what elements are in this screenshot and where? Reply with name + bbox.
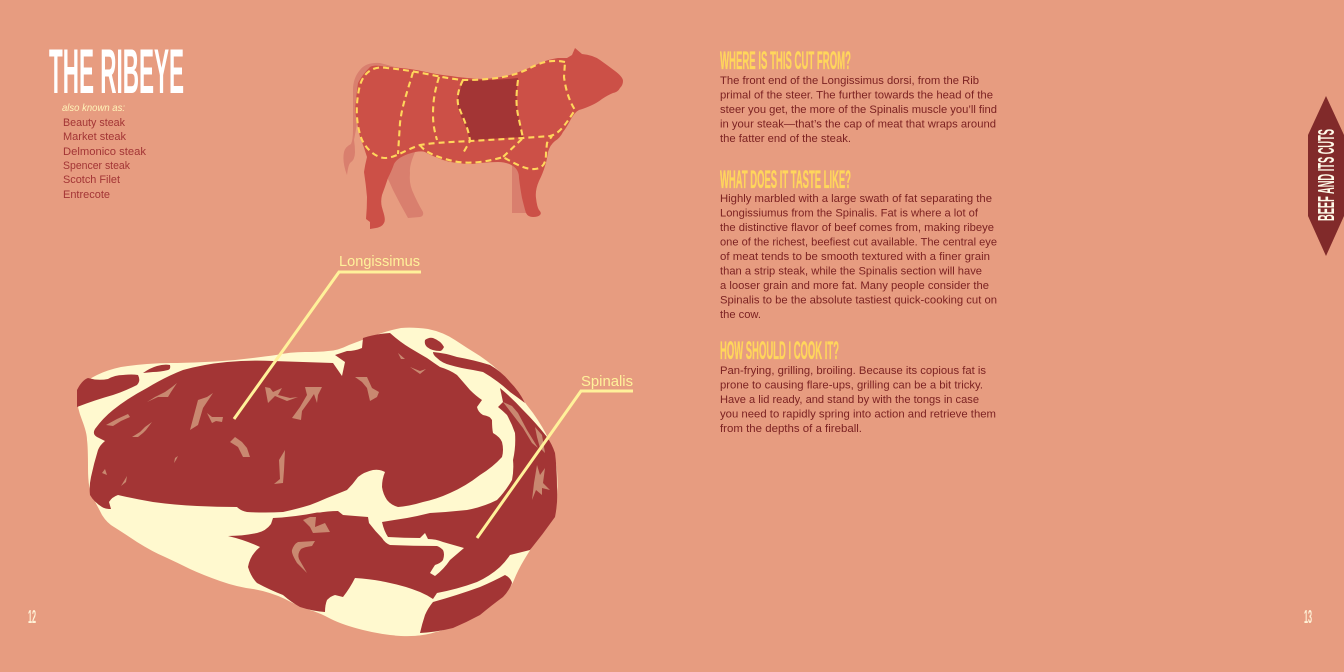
section: what does it taste like: Highly marbled with a large swath of fat separating the — [720, 193, 992, 205]
also known as list: Spencer steak — [63, 160, 131, 172]
section: how should I cook it: HOW SHOULD I COOK IT? — [720, 337, 839, 365]
section: where is this cut from: WHERE IS THIS CUT FROM? — [720, 47, 851, 75]
cow diagram — [343, 48, 623, 229]
section: what does it taste like: Longissiumus from the Spinalis. Fat is where a lot of — [720, 208, 978, 220]
section: how should I cook it: prone to causing flare-ups, grilling can be a bit tricky. — [720, 380, 983, 392]
section: where is this cut from: The front end of the Longissimus dorsi, from the Rib — [720, 75, 979, 87]
text: 13 — [1304, 607, 1312, 627]
steak illustration — [77, 328, 558, 636]
callout: Spinalis — [477, 374, 633, 538]
rib primal highlight — [458, 78, 523, 141]
cow far legs and tail — [343, 63, 530, 218]
section: what does it taste like: than a strip steak, while the Spinalis section will have — [720, 266, 982, 278]
section: what does it taste like: Spinalis to be the absolute tastiest quick-cooking cut on — [720, 294, 997, 306]
marbling — [102, 353, 550, 573]
text: THE RIBEYE — [49, 37, 184, 107]
section: where is this cut from: the fatter end of the steak. — [720, 133, 851, 145]
section: what does it taste like — [720, 166, 997, 321]
section: what does it taste like: a looser grain and more fat. Many people consider the — [720, 280, 989, 292]
also known as list: Delmonico steak — [63, 146, 147, 158]
Longissimus muscle — [90, 333, 503, 512]
cow body — [355, 48, 623, 229]
section: how should I cook it — [720, 337, 996, 435]
section: what does it taste like: the distinctive flavor of beef comes from, making ribeye — [720, 222, 994, 234]
callout: Spinalis: Spinalis — [581, 374, 633, 390]
section: where is this cut from: primal of the steer. The further towards the head of the — [720, 90, 993, 102]
section: how should I cook it: Pan-frying, grilling, broiling. Because its copious fat is — [720, 365, 986, 377]
callout: Longissimus — [234, 254, 421, 419]
fat outline — [77, 328, 558, 636]
butcher cut dashed lines — [357, 61, 575, 169]
chapter tab — [1308, 96, 1344, 256]
section: what does it taste like: of meat tends to be smooth textured with a finer grain — [720, 251, 990, 263]
section: what does it taste like: one of the richest, beefiest cut available. The central eye — [720, 236, 997, 248]
section: where is this cut from — [720, 47, 997, 145]
section: what does it taste like: the cow. — [720, 309, 761, 321]
section: how should I cook it: Have a lid ready, and stand by with the tongs in case — [720, 394, 979, 406]
section: where is this cut from: in your steak—that’s the cap of meat that wraps around — [720, 118, 996, 130]
small muscle pieces — [77, 338, 525, 633]
also known as list: Market steak — [63, 131, 127, 143]
section: how should I cook it: you need to rapidly spring into action and retrieve them — [720, 408, 996, 420]
section: where is this cut from: steer you get, the more of the Spinalis muscle you’ll find — [720, 104, 997, 116]
callout: Longissimus: Longissimus — [339, 254, 420, 270]
section: how should I cook it: from the depths of a fireball. — [720, 423, 862, 435]
also known as list — [62, 102, 147, 201]
also known as list: Entrecote — [63, 189, 110, 201]
also known as list: Scotch Filet — [63, 174, 120, 186]
section: what does it taste like: WHAT DOES IT TASTE LIKE? — [720, 166, 851, 194]
Spinalis and lower muscle — [228, 388, 557, 612]
text: 12 — [28, 607, 36, 627]
also known as list: Beauty steak — [63, 117, 126, 129]
also known as list: also known as: — [62, 102, 125, 114]
